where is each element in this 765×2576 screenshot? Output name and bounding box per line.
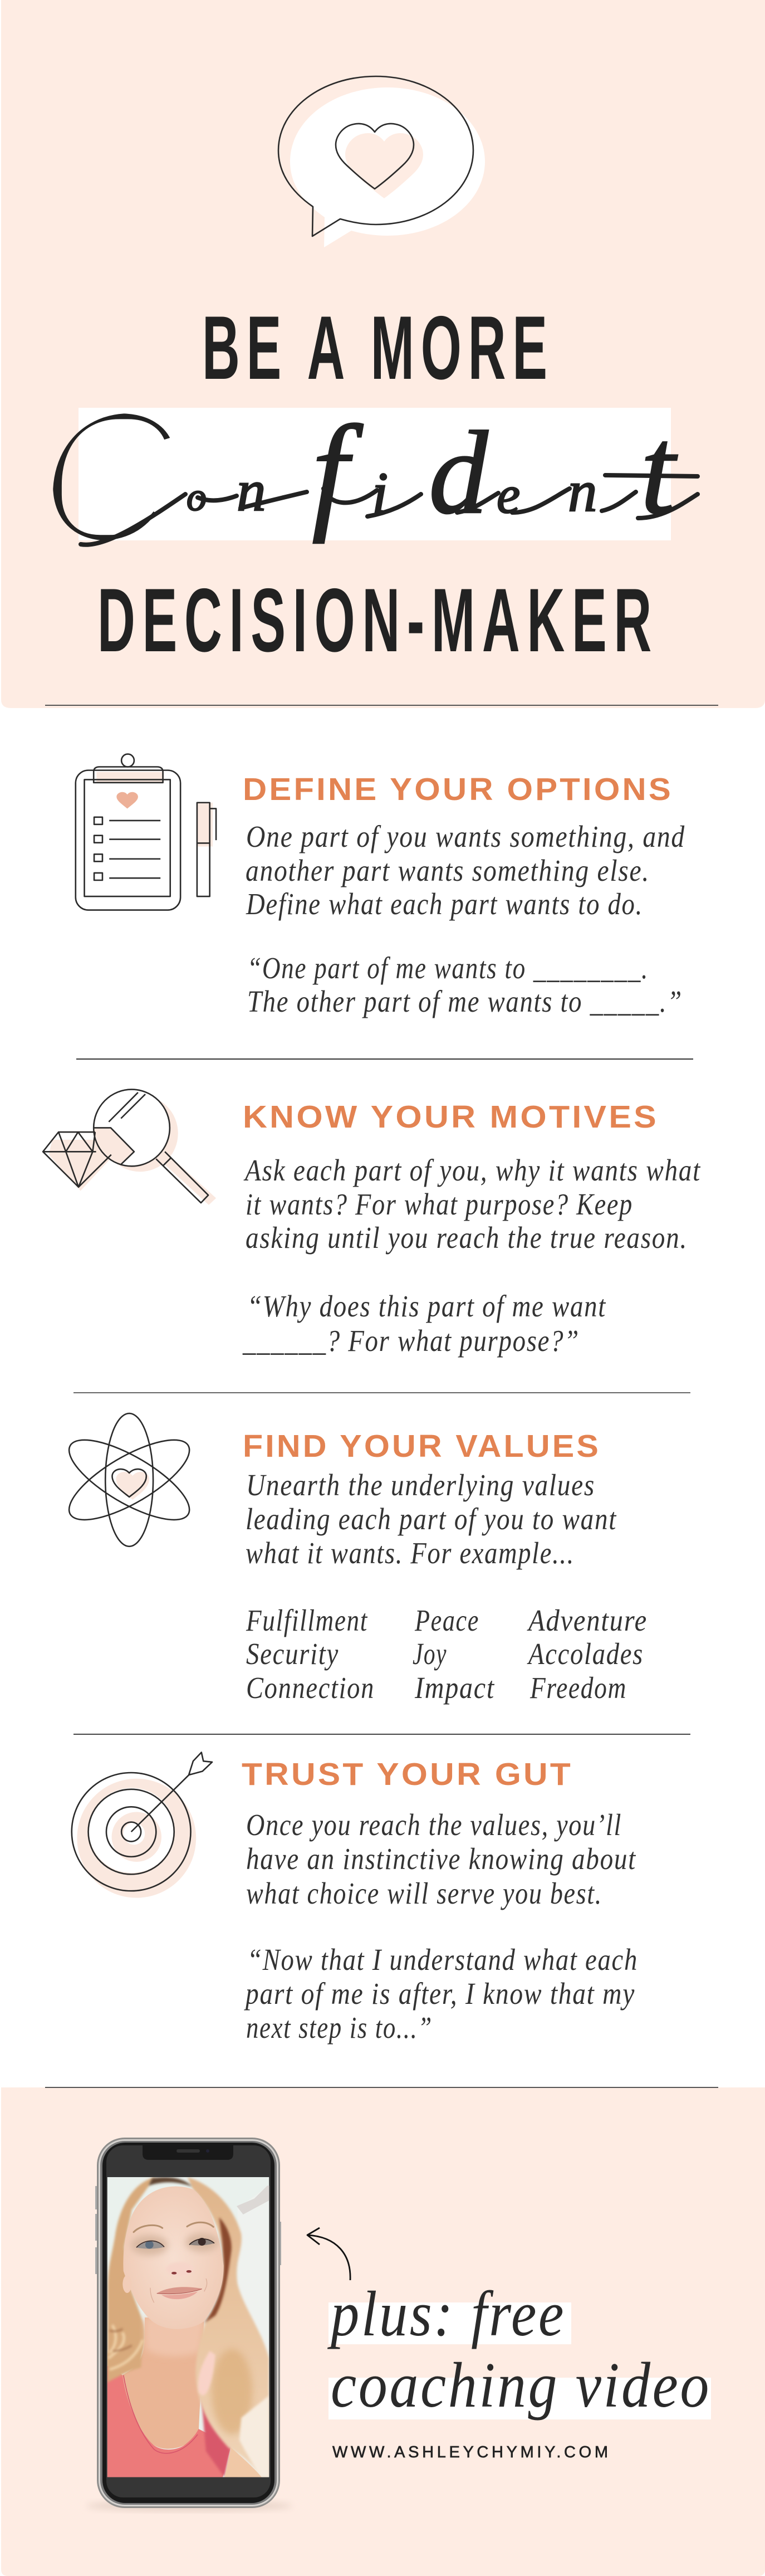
script word: Confident: n <box>568 458 597 524</box>
header panel <box>1 0 765 708</box>
connecting flourishes <box>81 475 698 545</box>
divider 1 <box>76 1058 693 1060</box>
body text: leading each part of you to want <box>246 1502 617 1536</box>
heading: FIND YOUR VALUES <box>243 1428 601 1464</box>
script word: Confident: n <box>237 458 266 523</box>
icon: clipboard and pen <box>76 754 216 910</box>
section: define your options <box>76 754 685 1018</box>
highlight: plus free <box>328 2302 571 2344</box>
highlight: coaching video <box>328 2378 711 2419</box>
heading: TRUST YOUR GUT <box>242 1757 573 1792</box>
body text: part of me is after, I know that my <box>244 1977 635 2011</box>
script word: Confident: i <box>372 460 388 525</box>
values list: Joy <box>413 1637 447 1671</box>
script word: Confident: C <box>38 370 179 584</box>
callout text: coaching video: coaching video <box>331 2350 711 2421</box>
body text: asking until you reach the true reason. <box>246 1221 688 1255</box>
values list: Fulfillment <box>246 1603 368 1637</box>
body text: Unearth the underlying values <box>246 1468 595 1502</box>
divider under header <box>45 705 718 706</box>
body text <box>242 1153 701 1358</box>
values list: Impact <box>414 1671 495 1705</box>
values list <box>246 1603 648 1705</box>
script word: Confident: e <box>497 465 520 524</box>
body text: “One part of me wants to ________. <box>247 951 649 985</box>
body text: it wants? For what purpose? Keep <box>246 1187 633 1221</box>
values list: Freedom <box>529 1671 627 1705</box>
heading: DEFINE YOUR OPTIONS <box>243 772 673 807</box>
body text: “Now that I understand what each <box>247 1943 638 1977</box>
values list: Peace <box>414 1603 479 1637</box>
values list: Security <box>246 1637 339 1671</box>
icon: diamond and magnifier <box>43 1090 216 1205</box>
icon: target with arrow <box>72 1753 212 1898</box>
phone with photo <box>86 2138 292 2511</box>
section: find your values <box>57 1413 648 1705</box>
icon: curved arrow pointing at phone <box>307 2228 350 2280</box>
body text: what it wants. For example... <box>246 1536 575 1570</box>
body text: ______? For what purpose?” <box>242 1324 580 1358</box>
values list: Connection <box>246 1671 375 1705</box>
body text: Once you reach the values, you’ll <box>246 1808 622 1842</box>
values list: Accolades <box>527 1637 644 1671</box>
script word: Confident <box>38 370 698 584</box>
footer panel <box>1 2087 765 2576</box>
title line: DECISION-MAKER: DECISION-MAKER <box>97 570 651 671</box>
body text <box>246 1468 617 1570</box>
body text: next step is to...” <box>246 2011 433 2045</box>
script word: Confident: o <box>187 475 207 519</box>
body text: The other part of me wants to _____.” <box>247 984 683 1018</box>
body text: what choice will serve you best. <box>246 1876 602 1910</box>
title line: BE A MORE: BE A MORE <box>202 297 547 398</box>
body text: Ask each part of you, why it wants what <box>243 1153 701 1187</box>
heading: KNOW YOUR MOTIVES <box>243 1099 659 1135</box>
body text: “Why does this part of me want <box>247 1289 606 1323</box>
body text: another part wants something else. <box>246 853 650 887</box>
section: trust your gut <box>72 1753 638 2045</box>
divider 3 <box>73 1734 690 1735</box>
white highlight behind Confident <box>79 408 671 540</box>
body text: Define what each part wants to do. <box>246 887 643 921</box>
website url: WWW.ASHLEYCHYMIY.COM <box>332 2443 608 2461</box>
divider 2 <box>73 1392 690 1393</box>
photo of woman smiling <box>107 2177 269 2477</box>
icon: speech bubble with heart <box>278 76 485 247</box>
script word: Confident: d <box>429 407 489 539</box>
script word: Confident: t <box>640 401 678 540</box>
body text: One part of you wants something, and <box>246 819 685 853</box>
script word: Confident: f <box>312 399 364 544</box>
body text <box>246 819 685 1018</box>
section: know your motives <box>43 1090 701 1358</box>
values list: Adventure <box>526 1603 648 1637</box>
callout text: plus free: plus: free <box>327 2279 566 2350</box>
divider above footer <box>45 2087 718 2088</box>
icon: atom with heart <box>57 1413 201 1546</box>
body text: have an instinctive knowing about <box>246 1842 636 1876</box>
body text <box>244 1808 638 2045</box>
